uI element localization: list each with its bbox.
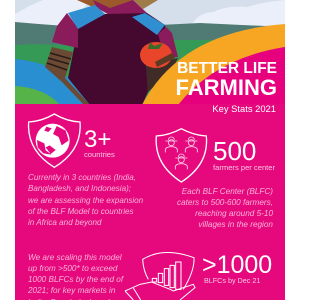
label: countries: countries — [84, 150, 115, 159]
icon: tomato — [140, 42, 175, 68]
text: scaling description — [28, 252, 124, 300]
label: farmers per center: farmers per center — [213, 163, 275, 172]
text: countries description: in Africa and beyond — [28, 218, 102, 227]
label: BLFCs by Dec 21: BLFCs by Dec 21 — [204, 276, 260, 285]
stat: 500: 500 — [213, 136, 256, 166]
icon: farmers shield — [156, 128, 208, 183]
text: countries description — [28, 173, 143, 227]
text: scaling description: We are scaling this model — [28, 252, 122, 262]
panel: pink stats background — [15, 104, 285, 300]
text: center description: Each BLF Center (BLFC) — [182, 186, 273, 196]
text: countries description: of the BLF Model to countries — [28, 207, 134, 216]
stat: 3+: 3+ — [84, 126, 111, 153]
text: center description: reaching around 5-10 — [195, 209, 273, 218]
text: center description: villages in the region — [198, 220, 273, 229]
subheading: key stats: Key Stats 2021 — [212, 103, 276, 114]
heading: farming: FARMING — [176, 75, 277, 100]
text: scaling description: 1000 BLFCs by the end of — [28, 275, 123, 284]
text: countries description: we are assessing the expansion — [28, 196, 143, 205]
heading: better life: BETTER LIFE — [177, 60, 277, 77]
text: scaling description: 2021; for key markets in — [28, 286, 115, 295]
text: scaling description: up from >500* to exceed — [28, 264, 117, 273]
text: center description — [177, 186, 273, 229]
icon: globe shield — [28, 113, 81, 168]
text: countries description: Currently in 3 countries (India, — [28, 173, 136, 182]
stat: >1000: >1000 — [202, 251, 272, 279]
icon: growth hand shield — [124, 252, 196, 300]
farmer figure — [45, 0, 178, 105]
hero illustration — [15, 0, 285, 104]
text: countries description: Bangladesh, and Indonesia); — [28, 184, 131, 193]
text: center description: caters to 500-600 farmers, — [177, 198, 273, 207]
